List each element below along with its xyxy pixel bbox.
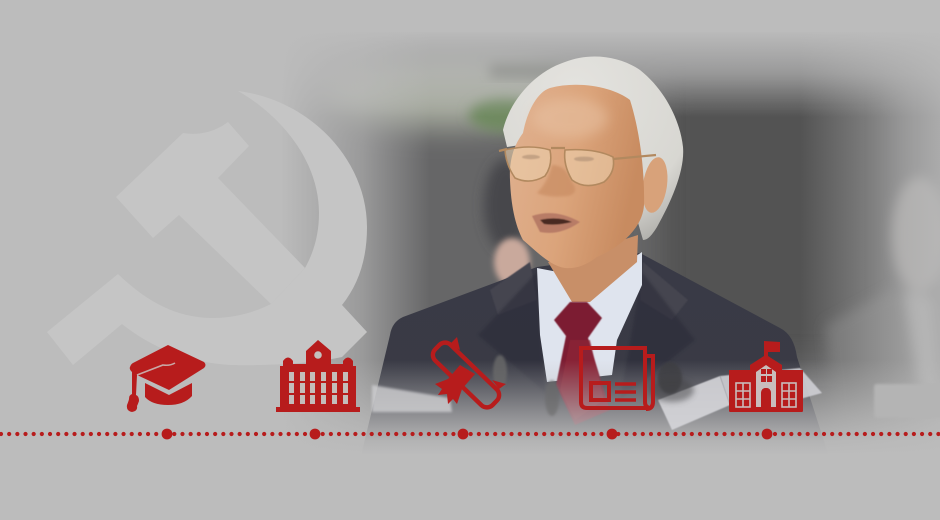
icon: school: [729, 341, 803, 412]
neck: [548, 235, 638, 302]
hammer: [116, 122, 305, 304]
glasses: [499, 147, 656, 186]
forehead highlight: [532, 98, 608, 138]
face: [510, 85, 644, 268]
emblem: hammer and sickle: [47, 91, 367, 365]
icon: diploma: [430, 337, 506, 411]
tie: [554, 302, 610, 425]
speaker portrait: [280, 56, 940, 460]
blurred man at right: [824, 177, 940, 383]
nose: [537, 165, 575, 197]
fade left: [280, 40, 419, 438]
lapels: [490, 262, 532, 314]
ear: [644, 157, 668, 213]
mouth: [532, 213, 580, 233]
fade right: [814, 44, 940, 436]
fade top: [280, 32, 940, 117]
microphones: [372, 355, 940, 430]
photo backdrop: [280, 32, 940, 455]
icon: graduation cap: [127, 345, 206, 412]
icon: university building: [276, 340, 360, 412]
dotted timeline: [1, 429, 940, 439]
icon: newspaper: [581, 348, 653, 409]
bottom fade: [280, 360, 940, 455]
hair: [503, 56, 683, 240]
eyebrows and eyes: [522, 155, 594, 161]
sickle: [47, 91, 367, 365]
suit: [365, 253, 821, 440]
shirt: [537, 252, 642, 382]
